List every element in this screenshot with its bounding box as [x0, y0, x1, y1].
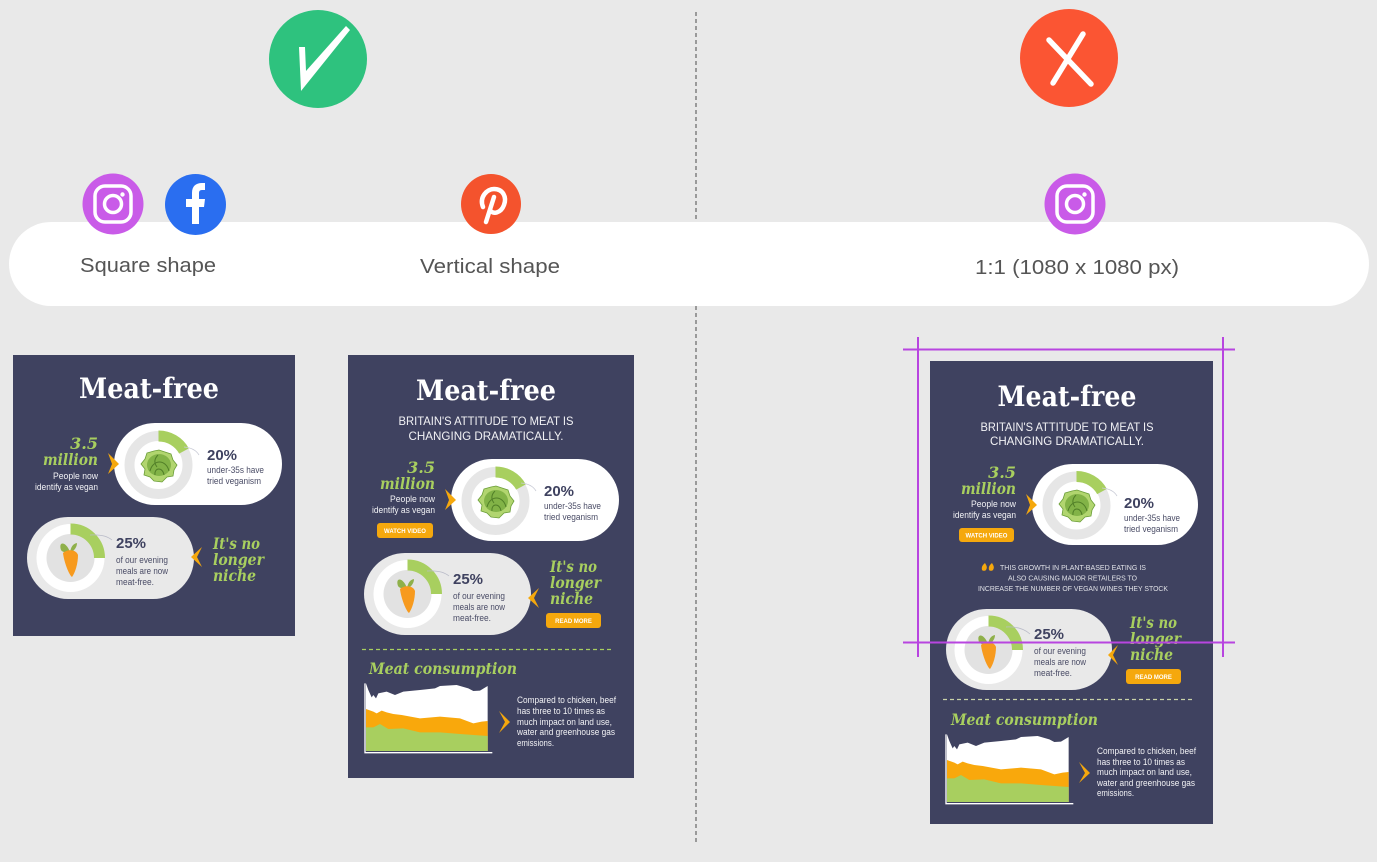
quote: THIS GROWTH IN PLANT-BASED EATING IS — [1000, 563, 1146, 572]
text: beef impact: emissions. — [517, 738, 554, 748]
arrow — [1108, 645, 1118, 665]
stat: no longer niche: longer — [1130, 629, 1182, 648]
stat: no longer niche: It's no — [549, 557, 597, 576]
subheading: CHANGING DRAMATICALLY. — [408, 429, 564, 443]
text: beef impact: emissions. — [1097, 788, 1134, 798]
button: read more: READ MORE — [555, 619, 592, 625]
panel: square infographic — [13, 355, 295, 636]
button: read more — [1126, 669, 1181, 684]
arrow — [1079, 762, 1090, 783]
quote: ALSO CAUSING MAJOR RETAILERS TO — [1008, 574, 1137, 582]
heading: Meat-free — [416, 374, 556, 407]
pill: 25% carrot: meat-free. — [1034, 668, 1072, 678]
pill: 25% carrot: meals are now — [453, 602, 505, 612]
stat: 3.5 million: identify as vegan — [35, 482, 98, 492]
area chart — [365, 683, 492, 753]
stat: 3.5 million — [372, 458, 435, 515]
stat: no longer niche: niche — [1130, 645, 1173, 664]
stat: no longer niche: niche — [213, 566, 256, 585]
pill: 25% carrot: of our evening — [116, 555, 168, 565]
white label band — [9, 222, 1369, 306]
button: watch video — [959, 528, 1014, 542]
label: 1:1 size: 1:1 (1080 x 1080 px) — [975, 257, 1179, 279]
stat: 3.5 million: 3.5 — [988, 463, 1016, 482]
stat: no longer niche: longer — [550, 573, 602, 592]
panel: vertical infographic — [348, 355, 634, 778]
pill: 25% carrot — [364, 553, 531, 635]
icon: instagram — [82, 174, 144, 234]
icon: carrot — [978, 635, 996, 669]
stat: 3.5 million: People now — [53, 471, 98, 481]
area chart — [946, 734, 1073, 804]
stat: 3.5 million: People now — [390, 494, 435, 504]
pill: 20% cabbage: tried veganism — [207, 476, 261, 486]
button: watch video: WATCH VIDEO — [384, 529, 426, 535]
text: beef impact — [1096, 746, 1196, 798]
label: vertical shape: Vertical shape — [420, 256, 560, 278]
text: beef impact: much impact on land use, — [1097, 767, 1192, 777]
icon: cabbage — [141, 450, 177, 482]
subheading: CHANGING DRAMATICALLY. — [990, 434, 1144, 448]
stat: no longer niche: longer — [213, 550, 265, 569]
heading: meat consumption: Meat consumption — [368, 659, 517, 678]
pill: 20% cabbage: under-35s have — [1124, 513, 1180, 523]
text: beef impact: has three to 10 times as — [1097, 757, 1185, 767]
button: watch video — [377, 523, 433, 538]
button: read more — [546, 613, 601, 628]
pill: 25% carrot: meat-free. — [453, 613, 491, 623]
stat: 3.5 million — [35, 434, 98, 492]
text: beef impact: water and greenhouse gas — [516, 727, 615, 737]
button: read more: READ MORE — [1135, 675, 1172, 681]
stat: 3.5 million: 3.5 — [407, 458, 435, 477]
text: beef impact: water and greenhouse gas — [1096, 778, 1195, 788]
crop guides — [903, 337, 1235, 657]
quote — [978, 563, 1168, 593]
heading: meat consumption: Meat consumption — [950, 710, 1098, 729]
pill: 25% carrot — [27, 517, 194, 599]
arrow — [1026, 494, 1037, 515]
pill: 20% cabbage — [1032, 464, 1198, 545]
icon: green check — [269, 10, 367, 108]
label: square shape: Square shape — [80, 255, 216, 277]
text: beef impact: much impact on land use, — [517, 717, 612, 727]
pill: 20% cabbage: 20% — [207, 447, 237, 464]
pill: 25% carrot: meals are now — [1034, 657, 1086, 667]
arrow — [108, 453, 119, 474]
stat: no longer niche: It's no — [212, 534, 260, 553]
quote: INCREASE THE NUMBER OF VEGAN WINES THEY STOCK — [978, 584, 1168, 593]
stat: 3.5 million: million — [43, 450, 98, 469]
arrow — [528, 588, 539, 608]
pill: 25% carrot: 25% — [1034, 626, 1064, 643]
icon: carrot — [60, 543, 78, 577]
pill: 20% cabbage: 20% — [1124, 495, 1154, 512]
pill: 20% cabbage — [451, 459, 619, 541]
pill: 20% cabbage: tried veganism — [544, 512, 598, 522]
icon: cabbage — [1059, 490, 1095, 522]
stat: 3.5 million: million — [380, 474, 435, 493]
stat: no longer niche — [212, 534, 265, 585]
pill: 20% cabbage: tried veganism — [1124, 524, 1178, 534]
stat: no longer niche — [549, 557, 602, 608]
text: beef impact: Compared to chicken, beef — [1097, 746, 1196, 756]
text: beef impact: has three to 10 times as — [517, 706, 605, 716]
subheading — [398, 414, 574, 443]
pill: 25% carrot: 25% — [116, 535, 146, 552]
pill: 20% cabbage — [114, 423, 282, 505]
heading: Meat-free — [79, 372, 219, 405]
stat: 3.5 million — [953, 463, 1016, 520]
pill: 25% carrot: of our evening — [453, 591, 505, 601]
stat: no longer niche — [1129, 613, 1182, 664]
pill: 20% cabbage: 20% — [544, 483, 574, 500]
stat: 3.5 million: identify as vegan — [372, 505, 435, 515]
heading: Meat-free — [998, 380, 1136, 413]
icon: facebook — [165, 174, 226, 235]
stat: 3.5 million: million — [961, 479, 1016, 498]
subheading: BRITAIN'S ATTITUDE TO MEAT IS — [398, 414, 574, 428]
icon: red cross — [1020, 9, 1118, 107]
pill: 25% carrot: 25% — [453, 571, 483, 588]
panel: rejected 1:1 crop infographic — [930, 361, 1213, 824]
subheading: BRITAIN'S ATTITUDE TO MEAT IS — [980, 420, 1154, 434]
icon: pinterest — [461, 174, 521, 234]
icon: instagram right — [1044, 174, 1106, 234]
pill: 25% carrot: meat-free. — [116, 577, 154, 587]
text: beef impact: Compared to chicken, beef — [517, 695, 616, 705]
text: beef impact — [516, 695, 616, 748]
arrow — [445, 489, 456, 510]
stat: 3.5 million: 3.5 — [70, 434, 98, 453]
pill: 20% cabbage: under-35s have — [544, 501, 601, 511]
pill: 25% carrot: of our evening — [1034, 646, 1086, 656]
stat: 3.5 million: People now — [971, 499, 1016, 509]
subheading — [980, 420, 1154, 448]
arrow — [191, 547, 202, 567]
pill: 20% cabbage: under-35s have — [207, 465, 264, 475]
stat: 3.5 million: identify as vegan — [953, 510, 1016, 520]
stat: no longer niche: It's no — [1129, 613, 1177, 632]
icon: carrot — [397, 579, 415, 613]
pill: 25% carrot: meals are now — [116, 566, 168, 576]
icon: cabbage — [478, 486, 514, 518]
button: watch video: WATCH VIDEO — [966, 534, 1008, 540]
arrow — [499, 711, 510, 733]
pill: 25% carrot — [946, 609, 1112, 690]
stat: no longer niche: niche — [550, 589, 593, 608]
